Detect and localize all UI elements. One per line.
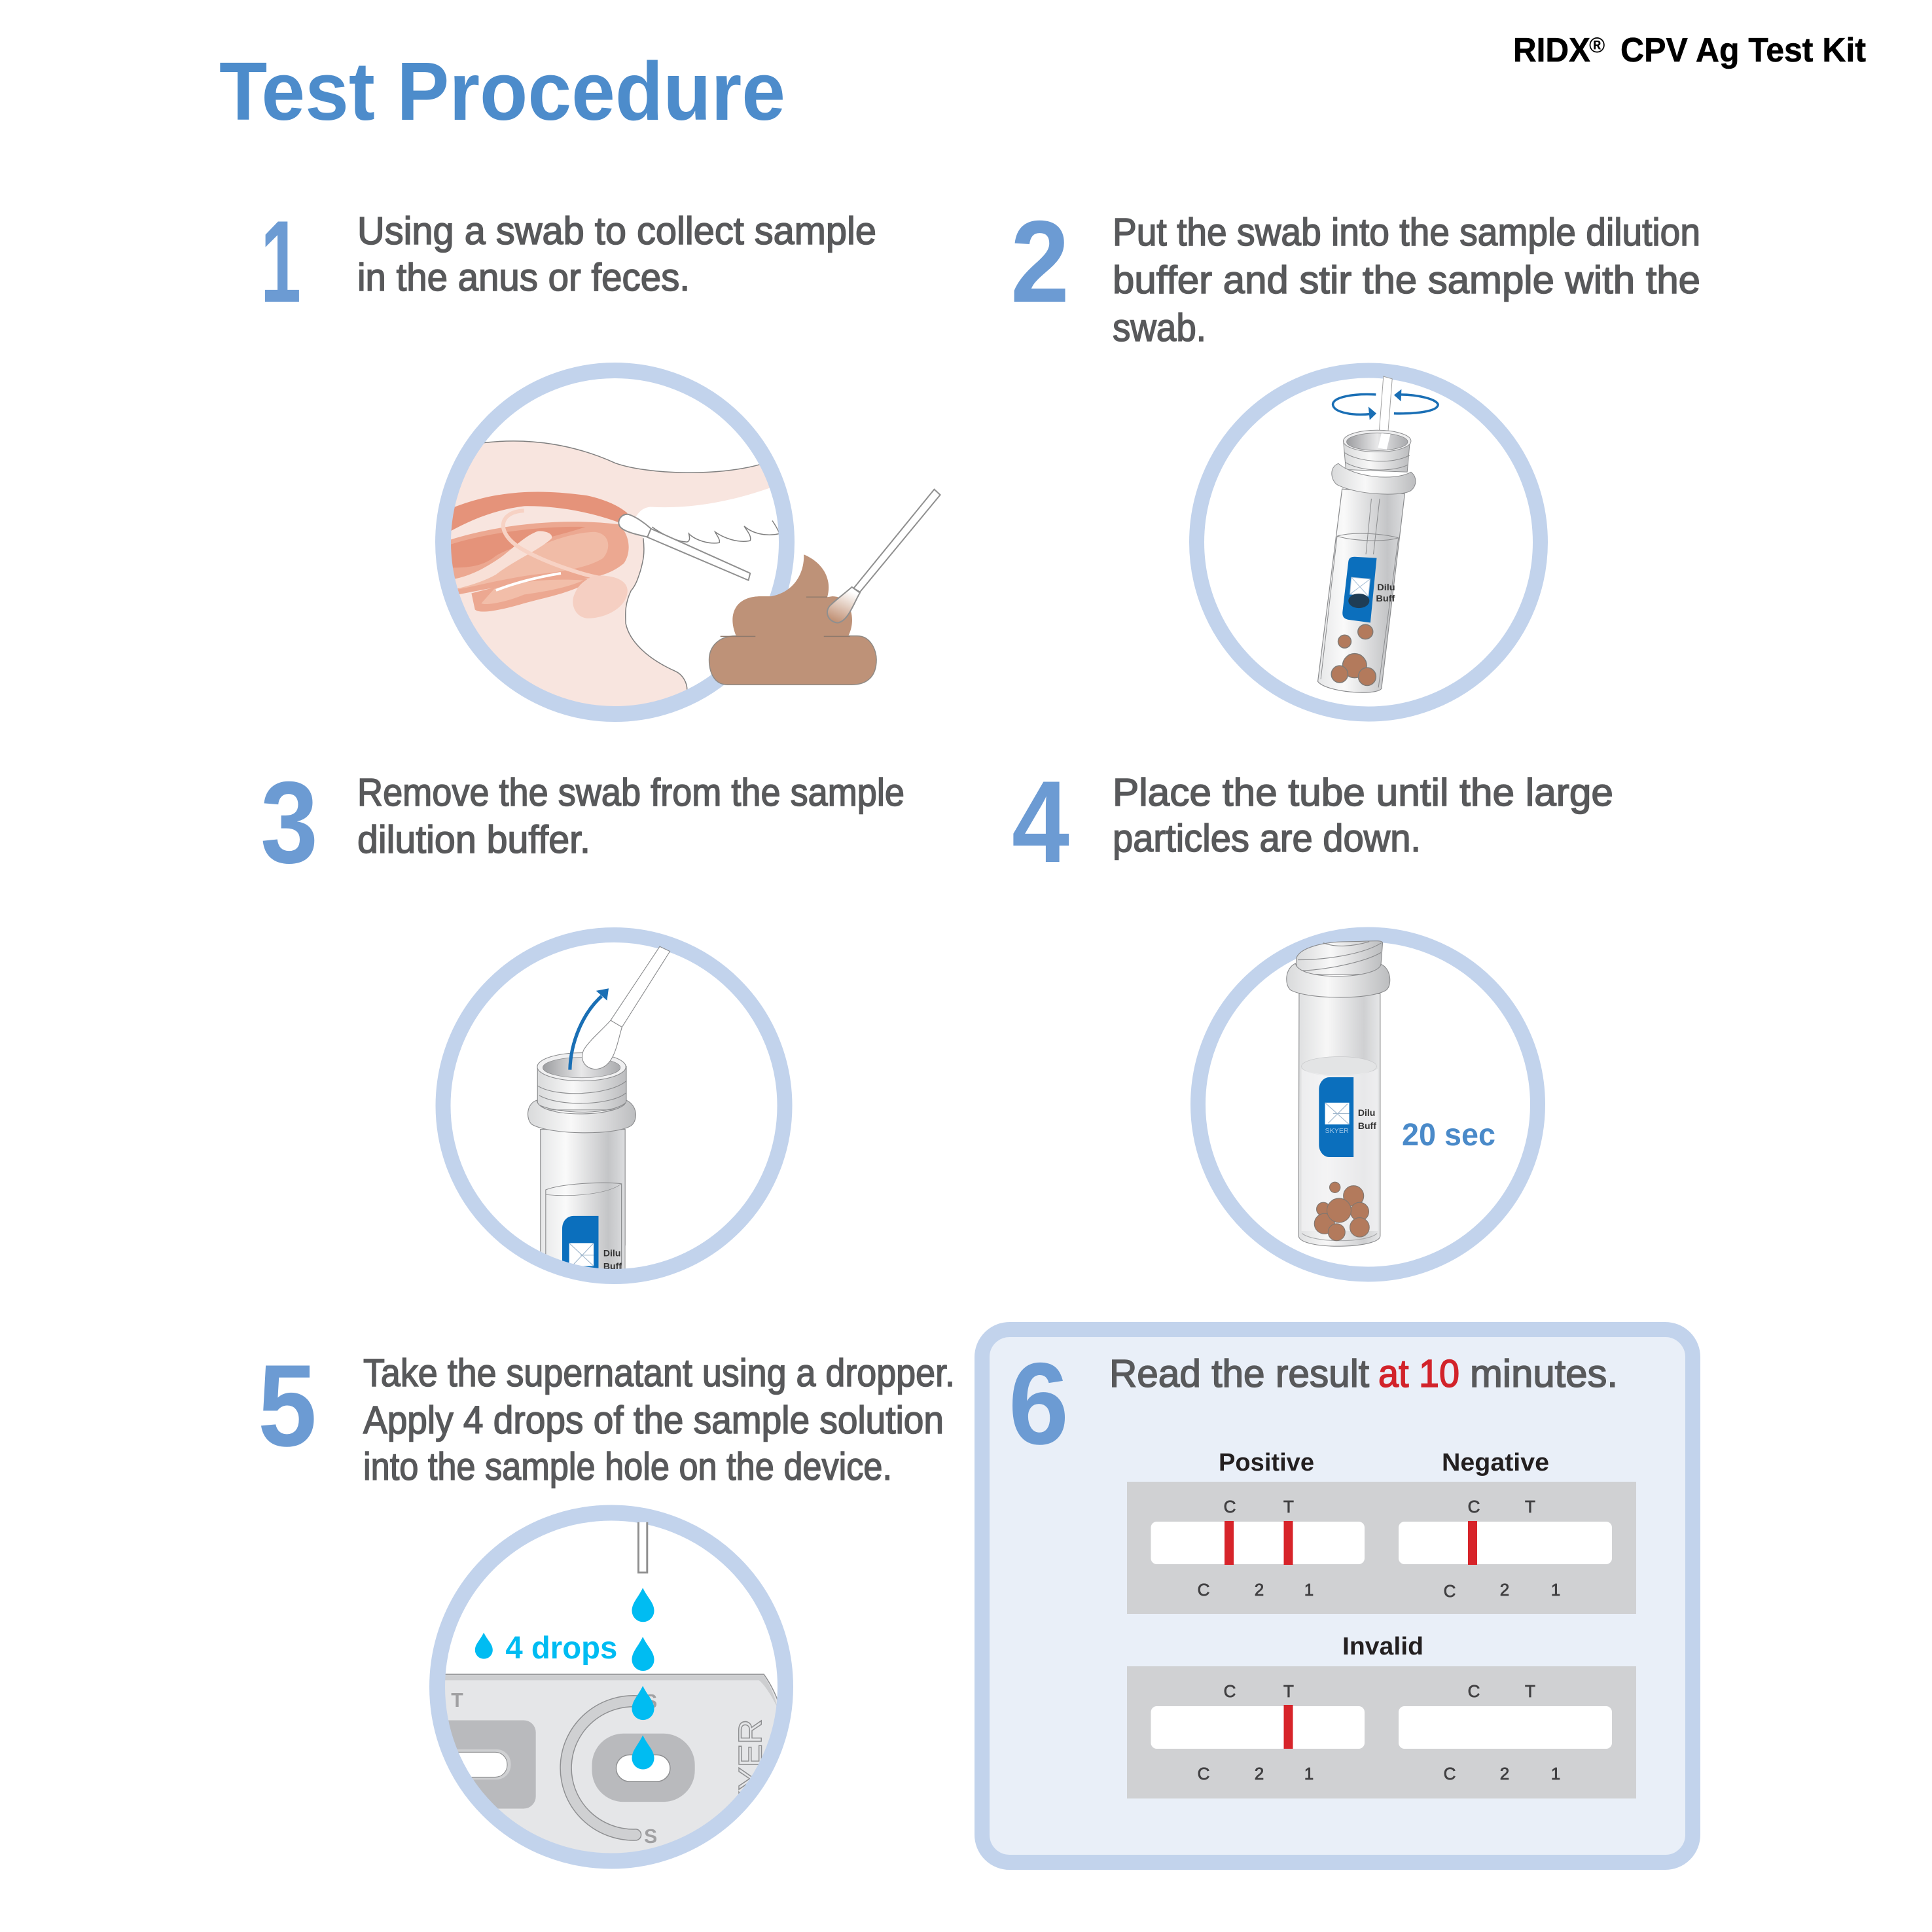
illustration: step 3 removing swab: Dilu — [603, 1248, 620, 1259]
step 2 text: buffer and stir the sample with the — [1113, 259, 1700, 302]
step 4 number: 4 — [1012, 757, 1069, 887]
illustration: step 3 removing swab: Buff — [603, 1261, 622, 1271]
positive and negative strips: C — [1468, 1497, 1480, 1516]
tube body — [1318, 489, 1404, 692]
step 3 text: dilution buffer. — [357, 818, 590, 861]
dropper tip — [638, 1522, 647, 1573]
step 2 text: Put the swab into the sample dilution — [1113, 211, 1700, 254]
illustration: step 1 sampling — [433, 370, 940, 721]
neck and collar — [1297, 941, 1383, 975]
step 6 number: 6 — [1009, 1338, 1069, 1469]
step 3 number: 3 — [260, 757, 318, 887]
step 5 number: 5 — [258, 1340, 317, 1471]
positive and negative strips: 1 — [1304, 1580, 1314, 1600]
illustration: step 3 removing swab — [443, 935, 785, 1279]
stick — [1378, 376, 1392, 450]
illustration: step 4 settling tube: Buff — [1358, 1120, 1376, 1131]
step 2 text — [1113, 211, 1700, 349]
positive and negative strips: 1 — [1551, 1580, 1560, 1600]
invalid strips: T — [1525, 1681, 1535, 1701]
positive and negative strips: T — [1525, 1497, 1535, 1516]
body — [451, 441, 770, 706]
invalid strips: C — [1444, 1764, 1456, 1783]
invalid strips: 1 — [1551, 1764, 1560, 1783]
panel: step 6 results — [982, 1330, 1692, 1863]
rotation arrows — [1333, 389, 1438, 420]
step 1 text: in the anus or feces. — [357, 256, 690, 299]
invalid strips: C — [1468, 1681, 1480, 1701]
device brand: SKYER — [732, 1719, 768, 1836]
collar and neck — [537, 1066, 626, 1110]
positive and negative strips: T — [1283, 1497, 1294, 1516]
illustration: step 4 settling tube: Dilu — [1358, 1107, 1375, 1118]
poop — [709, 554, 876, 685]
step 4 text: Place the tube until the large — [1113, 771, 1613, 814]
step 6 text: at 10 — [1378, 1352, 1459, 1395]
positive and negative strips: C — [1224, 1497, 1236, 1516]
step 6 text — [1109, 1352, 1618, 1395]
illustration: step 5 drops on device: T — [451, 1690, 463, 1711]
product name: CPV Ag Test Kit — [1620, 31, 1866, 69]
product name: ® — [1589, 33, 1605, 57]
step 4 text — [1113, 771, 1613, 860]
up arrow — [570, 988, 609, 1070]
sample hole — [592, 1734, 695, 1802]
step 1 text — [357, 209, 876, 299]
illustration: step 4 settling tube — [1198, 935, 1538, 1274]
product name — [1513, 31, 1866, 69]
step 3 text: Remove the swab from the sample — [357, 771, 904, 814]
label — [1319, 1077, 1353, 1157]
tube body — [1298, 993, 1380, 1246]
positive and negative strips: 2 — [1500, 1580, 1509, 1600]
neck and collar — [1344, 440, 1410, 472]
invalid strips: 2 — [1500, 1764, 1509, 1783]
invalid strips: 2 — [1255, 1764, 1264, 1783]
illustration: step 5 drops on device — [429, 1513, 785, 1872]
label — [562, 1216, 598, 1268]
product name: RIDX — [1513, 31, 1590, 69]
invalid strips: 1 — [1304, 1764, 1314, 1783]
step 2 text: swab. — [1113, 306, 1206, 349]
swab — [582, 946, 670, 1069]
ring — [443, 370, 787, 714]
positive and negative strips — [1127, 1482, 1636, 1614]
swab in feces — [827, 490, 940, 623]
invalid strips: C — [1198, 1764, 1209, 1783]
label — [1342, 557, 1376, 622]
sediment — [1331, 624, 1376, 686]
result window — [448, 1720, 536, 1809]
step 1 text: Using a swab to collect sample — [357, 209, 876, 253]
positive and negative strips: 2 — [1255, 1580, 1264, 1600]
illustration: step 2 stirring tube: Dilu — [1377, 582, 1395, 593]
step 1 number: 1 — [260, 196, 301, 327]
timer label: 20 sec — [1402, 1118, 1495, 1153]
step 6 text: minutes. — [1470, 1352, 1618, 1395]
illustration: step 2 stirring tube: Buff — [1376, 594, 1395, 604]
drops label: 4 drops — [505, 1630, 617, 1666]
step 3 text — [357, 771, 904, 861]
heading: invalid: Invalid — [1342, 1633, 1423, 1660]
drops — [475, 1588, 654, 1770]
sample channel — [566, 1701, 641, 1834]
step 4 text: particles are down. — [1113, 817, 1421, 860]
step 5 text: Take the supernatant using a dropper. — [363, 1351, 955, 1395]
step 5 text — [363, 1351, 955, 1488]
sediment cluster — [1314, 1182, 1369, 1241]
invalid strips: T — [1283, 1681, 1294, 1701]
invalid strips — [1127, 1666, 1636, 1798]
fur line — [652, 521, 779, 543]
illustration: step 5 drops on device: S — [644, 1691, 657, 1713]
title: Test Procedure — [219, 45, 785, 137]
illustration: step 2 stirring tube — [1196, 370, 1541, 714]
positive and negative strips: C — [1198, 1580, 1209, 1600]
invalid strips: C — [1224, 1681, 1236, 1701]
illustration: step 4 settling tube: SKYER — [1325, 1128, 1349, 1135]
positive and negative strips: C — [1444, 1581, 1456, 1601]
heading: positive: Positive — [1219, 1449, 1314, 1476]
step 5 text: into the sample hole on the device. — [363, 1445, 892, 1488]
step 6 text: Read the result — [1109, 1352, 1369, 1395]
swab in anus — [618, 514, 750, 581]
step 5 text: Apply 4 drops of the sample solution — [363, 1399, 944, 1442]
rectum layers — [451, 522, 629, 594]
tube body — [541, 1130, 625, 1279]
step 2 number: 2 — [1011, 196, 1069, 327]
heading: negative: Negative — [1442, 1449, 1549, 1476]
device — [445, 1674, 778, 1853]
illustration: step 5 drops on device: S — [644, 1826, 657, 1848]
